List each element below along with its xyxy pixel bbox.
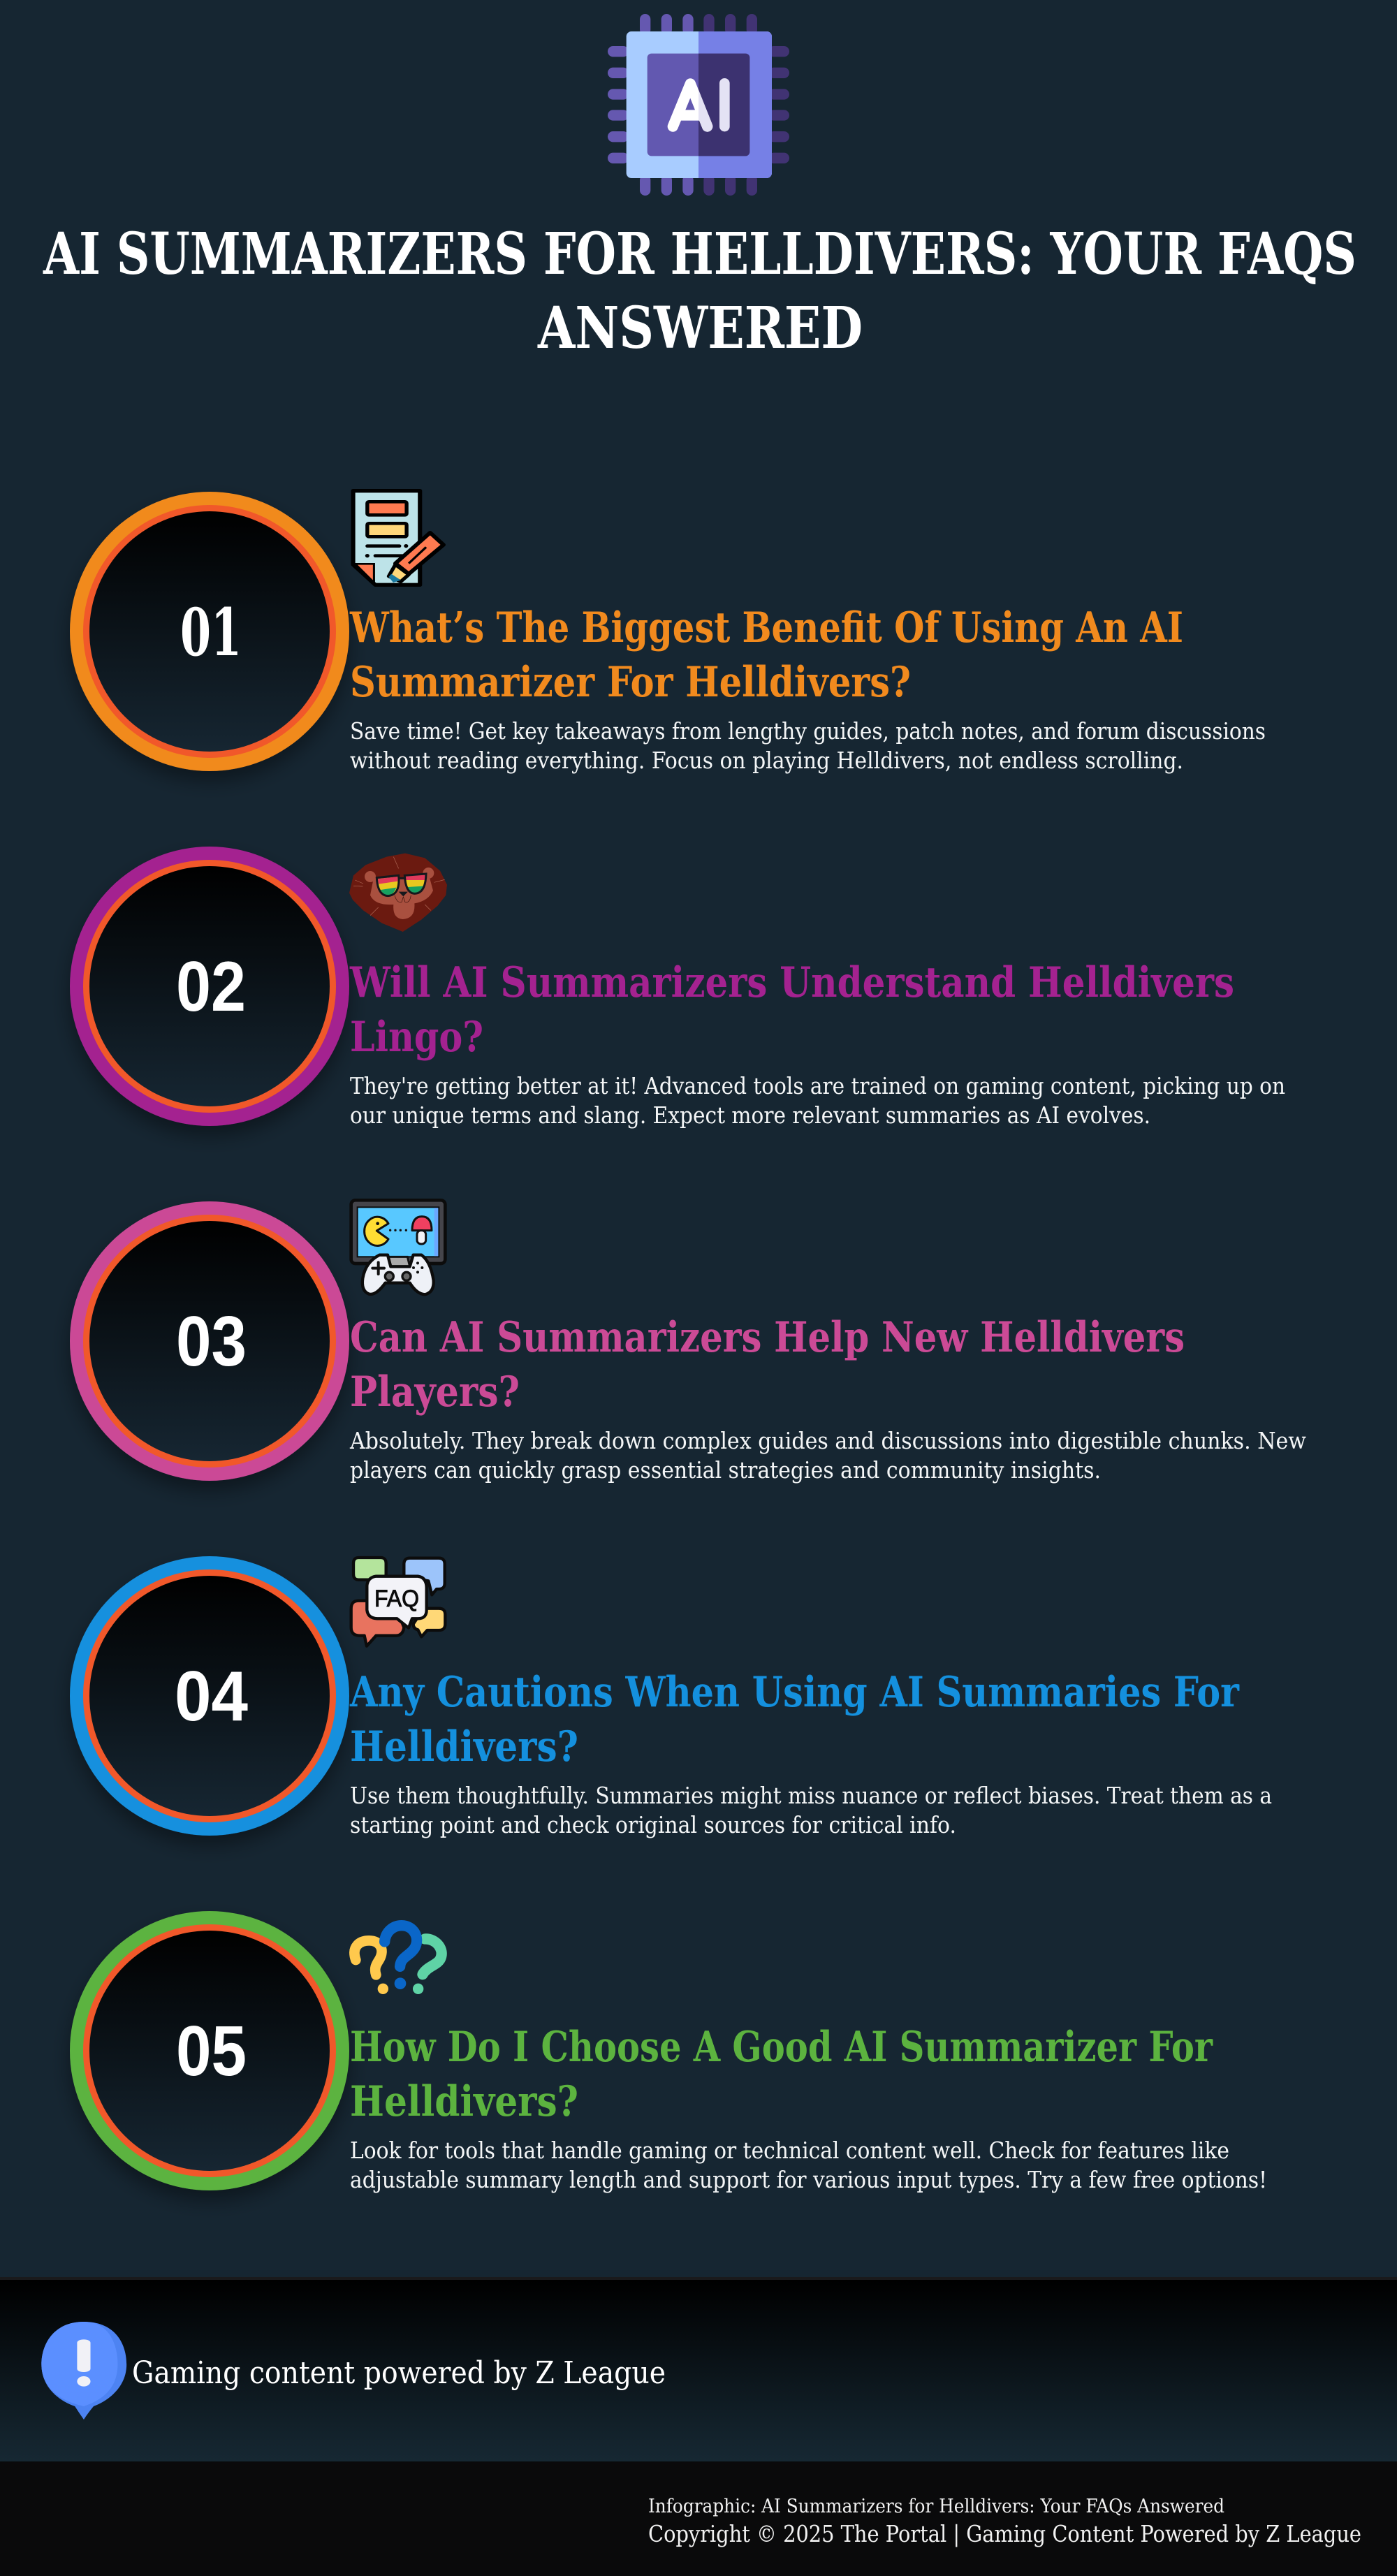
icon: FAQ speech bubbles: FAQ bbox=[374, 1586, 419, 1612]
number badge 01: 01 bbox=[180, 594, 242, 671]
number badge 01 bbox=[70, 492, 349, 771]
title: ANSWERED bbox=[537, 295, 863, 362]
heading: Helldivers? bbox=[350, 2077, 578, 2126]
body text: They're getting better at it! Advanced tools are trained on gaming content, picking up on bbox=[350, 1072, 1285, 1099]
icon: document and pencil bbox=[353, 491, 444, 585]
number badge 05: 05 bbox=[176, 2012, 247, 2091]
heading: Players? bbox=[350, 1368, 520, 1417]
heading bbox=[349, 603, 1183, 707]
body text: starting point and check original sources for critical info. bbox=[350, 1811, 956, 1838]
number badge 04: 04 bbox=[175, 1657, 248, 1736]
number badge 02: 02 bbox=[176, 948, 246, 1026]
body text: our unique terms and slang. Expect more relevant summaries as AI evolves. bbox=[350, 1102, 1150, 1129]
body text: adjustable summary length and support for various input types. Try a few free options! bbox=[350, 2166, 1267, 2193]
body text bbox=[349, 1427, 1306, 1484]
heading bbox=[350, 1313, 1185, 1417]
icon: FAQ speech bubbles bbox=[351, 1558, 445, 1646]
body text bbox=[350, 1072, 1285, 1129]
panel: footer bbox=[0, 2461, 1397, 2576]
panel: FAQ 4 bbox=[70, 1556, 1272, 1838]
body text bbox=[350, 1782, 1272, 1838]
heading bbox=[349, 1668, 1240, 1771]
heading: How Do I Choose A Good AI Summarizer For bbox=[350, 2023, 1213, 2072]
heading: Any Cautions When Using AI Summaries For bbox=[349, 1668, 1240, 1717]
number badge 03: 03 bbox=[176, 1303, 247, 1381]
heading: Summarizer For Helldivers? bbox=[350, 658, 911, 707]
footer caption: Infographic: AI Summarizers for Helldivers: Your FAQs Answered bbox=[648, 2496, 1224, 2517]
body text: Absolutely. They break down complex guides and discussions into digestible chunks. New bbox=[349, 1427, 1306, 1454]
panel: FAQ 1 bbox=[70, 491, 1266, 774]
call to action text: Gaming content powered by Z League bbox=[132, 2355, 666, 2391]
number badge 04 bbox=[70, 1556, 349, 1836]
body text: without reading everything. Focus on playing Helldivers, not endless scrolling. bbox=[350, 747, 1183, 774]
heading bbox=[349, 958, 1234, 1062]
body text: Save time! Get key takeaways from lengthy guides, patch notes, and forum discussions bbox=[350, 717, 1266, 745]
panel: FAQ 3 bbox=[70, 1200, 1306, 1484]
panel: call to action band bbox=[0, 2277, 1397, 2461]
body text: Use them thoughtfully. Summaries might miss nuance or reflect biases. Treat them as a bbox=[350, 1782, 1272, 1809]
number badge 03 bbox=[70, 1201, 349, 1481]
body text bbox=[350, 717, 1266, 774]
panel: FAQ 2 bbox=[70, 847, 1285, 1129]
number badge 05 bbox=[70, 1911, 349, 2190]
body text: players can quickly grasp essential strategies and community insights. bbox=[350, 1456, 1101, 1484]
heading bbox=[350, 2023, 1213, 2126]
icon: lion with sunglasses bbox=[349, 854, 447, 932]
body text bbox=[350, 2137, 1267, 2193]
panel: FAQ 5 bbox=[70, 1911, 1267, 2193]
icon: question marks bbox=[354, 1926, 441, 1994]
title bbox=[43, 221, 1356, 362]
heading: Can AI Summarizers Help New Helldivers bbox=[350, 1313, 1185, 1362]
number badge 02 bbox=[70, 847, 349, 1126]
icon: game screen and controller bbox=[351, 1200, 445, 1294]
icon: AI chip bbox=[608, 14, 789, 196]
icon: alert speech bubble bbox=[41, 2322, 126, 2420]
heading: Helldivers? bbox=[350, 1722, 578, 1771]
heading: Will AI Summarizers Understand Helldivers bbox=[349, 958, 1234, 1007]
body text: Look for tools that handle gaming or technical content well. Check for features like bbox=[350, 2137, 1229, 2164]
heading: What’s The Biggest Benefit Of Using An AI bbox=[349, 603, 1183, 652]
heading: Lingo? bbox=[350, 1013, 483, 1062]
